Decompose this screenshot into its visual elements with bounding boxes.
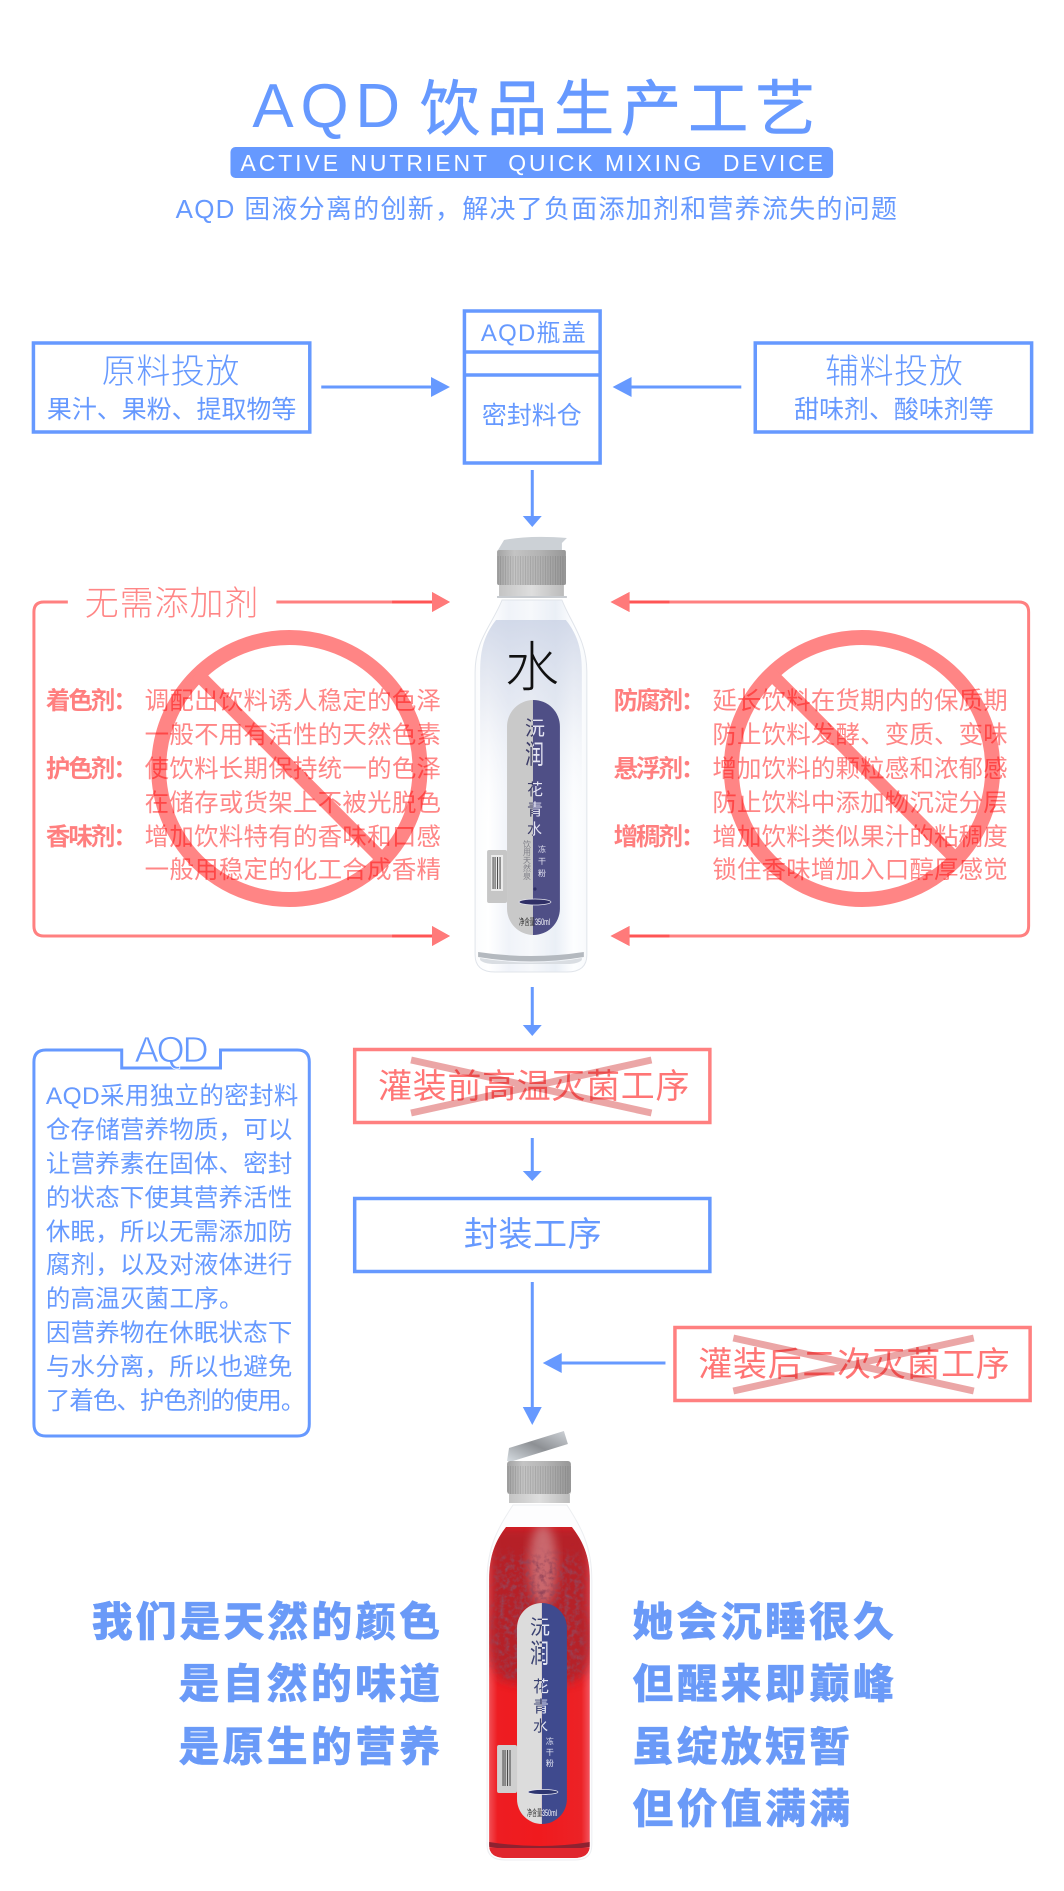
bottle label: 350ml: [535, 917, 550, 927]
bottle label: 然: [523, 863, 531, 873]
bottle label: 水: [533, 1718, 548, 1735]
bottle label: 青: [533, 1698, 549, 1716]
arrow: packaging to finished bottle: [523, 1282, 542, 1425]
bottle: water: [475, 537, 587, 972]
slogan left: 我们是天然的颜色: [92, 1599, 440, 1645]
panel: packaging process: [355, 1198, 710, 1272]
bottle label: 沅: [525, 717, 545, 740]
bottle label: 350ml: [542, 1808, 557, 1818]
text block: left additives: [46, 687, 441, 884]
bottle label: 天: [523, 856, 531, 865]
text block: left additives: 一般不用有活性的天然色素: [145, 721, 441, 749]
bottle label: 青: [527, 801, 543, 819]
bottle label: 沅: [530, 1616, 550, 1639]
bottle label: 花: [527, 781, 543, 799]
panel: pre-filling sterilisation crossed out: 灌装前高温灭菌工序: [378, 1068, 689, 1106]
panel: raw material input: [33, 343, 310, 432]
text block: right additives: 防腐剂：: [614, 687, 705, 715]
bottle label: 花: [533, 1678, 549, 1696]
slogan left: [92, 1599, 440, 1770]
slogan right: 她会沉睡很久: [633, 1599, 894, 1645]
text block: right additives: 防止饮料发酵、变质、变味: [712, 721, 1008, 749]
bottle label: 冻: [538, 844, 546, 854]
bottle label: 水: [533, 1718, 548, 1735]
cap: [497, 537, 567, 598]
panel: AQD explanation: [34, 1029, 309, 1436]
arrow: auxiliary to cap: [613, 377, 741, 397]
bottle label: 冻: [546, 1736, 554, 1746]
bottle: red drink: [487, 1431, 593, 1860]
text block: right additives: 悬浮剂：: [614, 755, 705, 783]
bottle label: 水: [527, 821, 542, 838]
panel: AQD cap: AQD瓶盖: [481, 320, 586, 347]
bottle label: 净含量: [519, 916, 535, 927]
title: [252, 72, 815, 143]
heading: no additives: 无需添加剂: [85, 585, 258, 623]
arrow: to packaging: [523, 1138, 542, 1181]
text block: right additives: 增稠剂：: [614, 823, 705, 851]
arrow: raw material to cap: [321, 377, 450, 397]
panel: AQD explanation: 因营养物在休眠状态下: [46, 1319, 292, 1347]
title: 饮品生产工艺: [420, 76, 815, 143]
panel: secondary sterilisation crossed out: 灌装后二次灭菌工序: [698, 1346, 1010, 1384]
text block: right additives: 延长饮料在货期内的保质期: [712, 687, 1008, 715]
tagline: AQD 固液分离的创新，解决了负面添加剂和营养流失的问题: [176, 194, 897, 224]
slogan left: 是原生的营养: [179, 1724, 440, 1770]
panel: auxiliary material input: 甜味剂、酸味剂等: [794, 396, 994, 424]
text block: left additives: 使饮料长期保持统一的色泽: [145, 755, 441, 783]
bottle label: 干: [546, 1748, 554, 1757]
bottle label: 泉: [523, 871, 531, 881]
bottle label: [487, 700, 560, 935]
panel: AQD explanation: 了着色、护色剂的使用。: [46, 1387, 305, 1415]
arrow: secondary sterilisation to line: [543, 1353, 665, 1373]
slogan right: 但醒来即巅峰: [633, 1661, 894, 1707]
text block: right additives: 锁住香味增加入口醇厚感觉: [712, 856, 1008, 884]
text block: right additives: 防止饮料中添加物沉淀分层: [712, 789, 1008, 817]
panel: AQD explanation: 仓存储营养物质，可以: [46, 1116, 292, 1144]
panel: AQD explanation: 的高温灭菌工序。: [46, 1285, 243, 1313]
bottle label: 青: [527, 801, 543, 819]
text block: right additives: 增加饮料类似果汁的粘稠度: [712, 823, 1008, 851]
bottle label: [497, 1603, 567, 1824]
bottle label: 粉: [538, 868, 546, 878]
icon: prohibition sign right: [731, 638, 993, 900]
text block: right additives: 增加饮料的颗粒感和浓郁感: [712, 755, 1008, 783]
panel: AQD explanation: 让营养素在固体、密封: [46, 1150, 292, 1178]
text block: left additives: 护色剂：: [46, 755, 138, 783]
bottle label: 花: [533, 1678, 549, 1696]
bottle label: 沅: [530, 1616, 550, 1639]
bottle label: 沅: [525, 717, 545, 740]
bottle label: 润: [525, 740, 544, 770]
bracket: no additives right: [611, 592, 1029, 946]
bottle label: 干: [538, 857, 546, 866]
bracket: no additives left: [34, 592, 450, 946]
text block: right additives: [614, 687, 1008, 884]
slogan right: [633, 1599, 894, 1832]
bottle label: 润: [525, 740, 544, 770]
subtitle pill: ACTIVE NUTRIENT QUICK MIXING DEVICE: [240, 150, 823, 176]
slogan right: 虽绽放短暂: [633, 1724, 850, 1770]
title: AQD: [252, 72, 400, 141]
panel: AQD explanation: AQD: [135, 1029, 209, 1070]
panel: auxiliary material input: 辅料投放: [825, 353, 963, 391]
panel: AQD explanation: 与水分离，所以也避免: [46, 1353, 292, 1381]
bottle label: 润: [530, 1639, 549, 1669]
panel: AQD explanation: 休眠，所以无需添加防: [46, 1218, 292, 1246]
text block: left additives: 增加饮料特有的香味和口感: [145, 823, 441, 851]
bottle label: 净含量: [527, 1807, 542, 1818]
character: water: 水: [505, 638, 559, 698]
bottle label: 用: [523, 848, 531, 857]
arrow: bottle to filling sterilisation: [523, 987, 542, 1036]
panel: raw material input: 原料投放: [102, 353, 239, 391]
panel: pre-filling sterilisation crossed out: [355, 1050, 710, 1122]
text block: left additives: 着色剂：: [46, 687, 138, 715]
text block: left additives: 调配出饮料诱人稳定的色泽: [145, 687, 441, 715]
panel: AQD explanation: AQD采用独立的密封料: [46, 1082, 298, 1110]
panel: raw material input: 果汁、果粉、提取物等: [47, 396, 296, 424]
panel: auxiliary material input: [755, 343, 1032, 432]
panel: packaging process: 封装工序: [464, 1216, 602, 1254]
text block: left additives: 在储存或货架上不被光脱色: [145, 789, 441, 817]
text block: left additives: 香味剂：: [46, 823, 138, 851]
cap: [507, 1431, 571, 1503]
panel: AQD explanation: 的状态下使其营养活性: [46, 1184, 292, 1212]
slogan left: 是自然的味道: [179, 1661, 440, 1707]
panel: secondary sterilisation crossed out: [675, 1328, 1030, 1400]
panel: AQD cap: [464, 311, 601, 463]
icon: prohibition sign left: [159, 638, 420, 900]
bottle label: 青: [533, 1698, 549, 1716]
panel: AQD explanation: 腐剂，以及对液体进行: [46, 1251, 292, 1279]
bottle label: 花: [527, 781, 543, 799]
text block: left additives: 一般用稳定的化工合成香精: [145, 856, 441, 884]
bottle label: 水: [527, 821, 542, 838]
arrow: cap to bottle: [523, 470, 542, 527]
bottle label: 饮: [523, 839, 531, 849]
slogan right: 但价值满满: [633, 1786, 850, 1832]
panel: AQD cap: 密封料仓: [482, 402, 582, 430]
bottle label: 润: [530, 1639, 549, 1669]
bottle label: 粉: [546, 1758, 554, 1768]
